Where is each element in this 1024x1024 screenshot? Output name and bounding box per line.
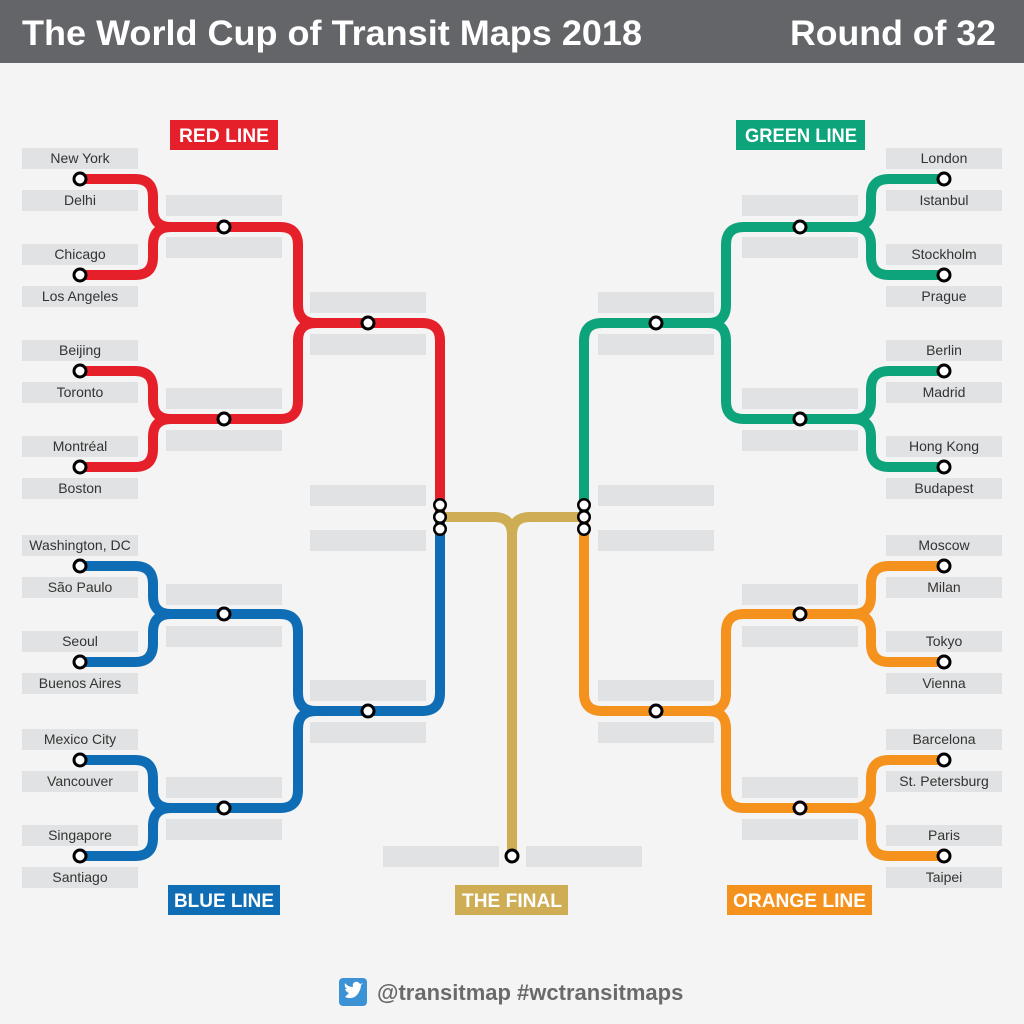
team name boxes right: Budapest	[914, 480, 974, 496]
team name boxes left: Seoul	[62, 633, 98, 649]
team name boxes left: New York	[50, 150, 111, 166]
interchange left	[433, 498, 447, 536]
team name boxes left: Buenos Aires	[39, 675, 121, 691]
team name boxes left: São Paulo	[48, 579, 113, 595]
team name boxes right: Prague	[921, 288, 967, 304]
team name boxes left: Toronto	[57, 384, 104, 400]
team name boxes right: Hong Kong	[909, 438, 979, 454]
interchange right	[577, 498, 591, 536]
blue line tag	[168, 885, 280, 915]
icon: twitter	[339, 978, 367, 1006]
team name boxes right: Barcelona	[912, 731, 976, 747]
team name boxes right: Istanbul	[919, 192, 969, 208]
team name boxes left: Mexico City	[44, 731, 116, 747]
header bar	[0, 0, 1024, 63]
final tag	[455, 885, 568, 915]
team name boxes right: Paris	[928, 827, 960, 843]
team name boxes left	[22, 148, 138, 888]
blue line tag: BLUE LINE	[174, 891, 274, 912]
team name boxes left: Montréal	[53, 438, 107, 454]
team name boxes right	[886, 148, 1002, 888]
footer	[339, 978, 683, 1006]
empty result boxes	[166, 195, 858, 867]
round label: Round of 32	[790, 14, 996, 53]
team name boxes left: Delhi	[64, 192, 96, 208]
orange line tag: ORANGE LINE	[733, 891, 866, 912]
team name boxes right: Moscow	[918, 537, 971, 553]
team name boxes left: Los Angeles	[42, 288, 118, 304]
orange line	[584, 522, 944, 856]
team name boxes right: Tokyo	[926, 633, 962, 649]
red line	[80, 179, 440, 512]
handle text: @transitmap #wctransitmaps	[377, 980, 683, 1005]
team name boxes left: Chicago	[54, 246, 106, 262]
final tag: THE FINAL	[462, 891, 562, 912]
blue line	[80, 522, 440, 856]
team name boxes right: St. Petersburg	[899, 773, 989, 789]
team name boxes left: Singapore	[48, 827, 112, 843]
team name boxes left: Beijing	[59, 342, 101, 358]
team name boxes left: Boston	[58, 480, 102, 496]
team name boxes left: Santiago	[52, 869, 108, 885]
green line tag	[736, 120, 865, 150]
title: The World Cup of Transit Maps 2018	[22, 14, 642, 53]
team name boxes right: Madrid	[923, 384, 965, 400]
team name boxes right: Stockholm	[911, 246, 977, 262]
green line tag: GREEN LINE	[745, 126, 857, 147]
gold final line	[440, 517, 584, 856]
team name boxes right: Berlin	[926, 342, 962, 358]
team name boxes right: Milan	[927, 579, 961, 595]
red line tag	[170, 120, 278, 150]
stations	[74, 173, 950, 862]
team name boxes left: Vancouver	[47, 773, 113, 789]
team name boxes right: London	[921, 150, 967, 166]
team name boxes right: Taipei	[926, 869, 962, 885]
team name boxes left: Washington, DC	[29, 537, 131, 553]
orange line tag	[727, 885, 872, 915]
team name boxes right: Vienna	[922, 675, 966, 691]
red line tag: RED LINE	[179, 126, 269, 147]
green line	[584, 179, 944, 512]
